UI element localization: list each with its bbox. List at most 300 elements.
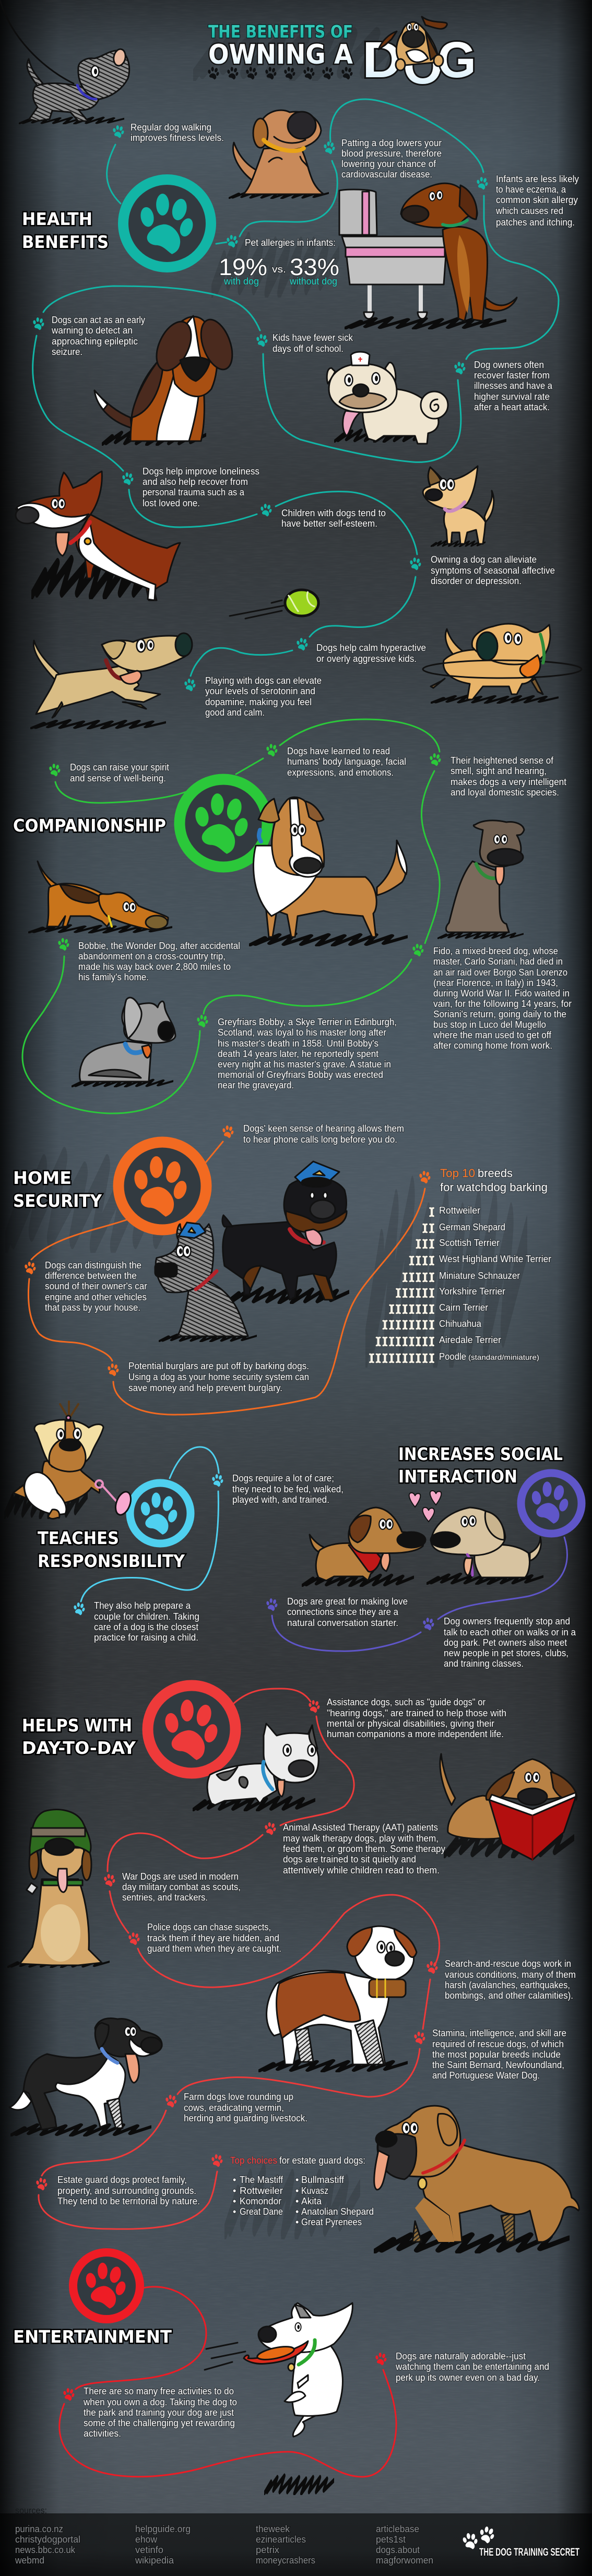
- list: top 10 watchdog breeds: Scottish Terrier: [439, 1238, 500, 1248]
- text: recovery: after a heart attack.: [474, 402, 550, 412]
- sources column 4: [376, 2524, 433, 2566]
- text: adorable: [395, 2351, 549, 2383]
- text: bobbie: abandonment on a cross-country trip,: [78, 951, 226, 961]
- sources column 3: ezinearticles: [256, 2534, 306, 2545]
- heading: helps with day-to-day: HELPS WITH: [22, 1715, 132, 1736]
- stat: pet allergies in infants: 19%: [219, 254, 267, 280]
- icon: puppy in diaper with rattle: [4, 1402, 134, 1519]
- icon: grey striped dog on leash: [19, 48, 129, 124]
- text: patting: lowering your chance of: [341, 159, 436, 169]
- text: therapy dogs: dogs are trained to sit quietly and: [283, 1854, 416, 1865]
- connector: responsibility curve: [81, 1447, 219, 1601]
- text: burglars: [128, 1361, 309, 1393]
- sources column 4: magforwomen: [376, 2555, 433, 2566]
- sources column 2: helpguide.org: [135, 2524, 191, 2534]
- text: assistance dogs: mental or physical disabilities, giving their: [327, 1718, 494, 1729]
- text: recovery: [474, 360, 553, 412]
- text: assistance dogs: Assistance dogs, such as "guide dogs" or: [327, 1697, 486, 1707]
- text: police dogs: guard them when they are caught.: [147, 1943, 281, 1954]
- text: therapy dogs: Animal Assisted Therapy (AAT) patients: [283, 1822, 438, 1833]
- heading: health benefits: BENEFITS: [22, 232, 109, 252]
- text: adorable: watching them can be entertaining and: [395, 2361, 549, 2372]
- text: epileptic: seizure.: [52, 347, 82, 357]
- text: free activities: the park and training your dog are just: [84, 2407, 234, 2418]
- health paw markers: [33, 125, 488, 691]
- text: dog walking: improves fitness levels.: [131, 133, 224, 143]
- text: war dogs: [122, 1871, 241, 1903]
- list: top choices for estate guard dogs: •: [295, 2196, 299, 2206]
- text: prepare for children: [94, 1600, 199, 1643]
- text: free activities: [83, 2386, 237, 2439]
- text: greyfriars bobby: Scotland, was loyal to his master long after: [218, 1027, 386, 1038]
- connector: day-to-day curve: [39, 1689, 440, 2229]
- list: top choices for estate guard dogs: Top choices: [230, 2155, 277, 2166]
- text: greyfriars bobby: memorial of Greyfriars Bobby was erected: [218, 1070, 383, 1080]
- text: estate guard dogs: property, and surrounding grounds.: [57, 2186, 196, 2196]
- list: top 10 watchdog breeds: Rottweiler: [439, 1205, 480, 1216]
- text: assistance dogs: [327, 1697, 506, 1739]
- text: greyfriars bobby: near the graveyard.: [218, 1080, 294, 1090]
- icon: tan sitting dog: [229, 110, 329, 198]
- text: war dogs: War Dogs are used in modern: [122, 1871, 239, 1882]
- text: therapy dogs: attentively while children read to them.: [283, 1865, 440, 1875]
- sources column 3: moneycrashers: [256, 2555, 315, 2566]
- text: fido: Fido, a mixed-breed dog, whose: [433, 946, 558, 956]
- list: top choices for estate guard dogs: •: [295, 2217, 299, 2227]
- icon: scottish terrier police dog: [155, 1222, 257, 1342]
- text: free activities: There are so many free activities to do: [84, 2386, 234, 2396]
- heading: home security: [13, 1168, 102, 1211]
- text: bobbie: made his way back over 2,800 miles to: [78, 961, 231, 972]
- text: sick days: days off of school.: [273, 343, 344, 354]
- text: fido: where the man used to get off: [433, 1030, 552, 1040]
- home security paw markers: [25, 1125, 431, 1376]
- stat: pet allergies in infants: vs.: [272, 264, 286, 275]
- text: love connections: connections since they are a: [287, 1607, 399, 1617]
- text: police dogs: [147, 1922, 281, 1954]
- text: free activities: some of the challenging yet rewarding: [84, 2418, 235, 2428]
- text: care: Dogs require a lot of care;: [232, 1473, 334, 1483]
- icon: greyfriars bobby terrier: [72, 998, 175, 1087]
- text: loneliness: Dogs help improve loneliness: [143, 466, 259, 477]
- text: adorable: Dogs are naturally adorable--just: [396, 2351, 526, 2361]
- text: epileptic: approaching epileptic: [52, 336, 138, 347]
- icon: corgi: [16, 471, 180, 600]
- text: greyfriars bobby: his master's death in 1858. Until Bobby's: [218, 1038, 378, 1049]
- text: burglars: Potential burglars are put off by barking dogs.: [128, 1361, 309, 1371]
- title line: the benefits of: THE BENEFITS OF: [208, 21, 353, 42]
- text: fido: (near Florence, in Italy) in 1943,: [433, 978, 558, 988]
- text: care: played with, and trained.: [232, 1494, 329, 1505]
- text: dog walking: [131, 122, 224, 143]
- icon: home security paw ring: [119, 1142, 206, 1230]
- companionship paw markers: [49, 744, 441, 1027]
- text: eczema: which causes red: [495, 206, 563, 216]
- text: bobbie: Bobbie, the Wonder Dog, after accidental: [78, 941, 240, 951]
- text: eczema: [495, 174, 579, 228]
- sources column 2: [135, 2524, 191, 2566]
- text: serotonin: Playing with dogs can elevate: [205, 675, 322, 686]
- text: prepare for children: practice for raising a child.: [94, 1632, 198, 1643]
- text: war dogs: day military combat as scouts,: [122, 1882, 241, 1892]
- text: rescue breeds: the most popular breeds include: [432, 2049, 561, 2060]
- text: epileptic: Dogs can act as an early: [52, 315, 145, 325]
- icon: social paw ring: [521, 1473, 582, 1534]
- text: assistance dogs: "hearing dogs," are trained to help those with: [327, 1708, 506, 1718]
- text: search and rescue: [445, 1958, 576, 2001]
- responsibility paw markers: [74, 1474, 223, 1615]
- stat: pet allergies in infants: [219, 238, 339, 287]
- icon: bobbie the wonder dog: [28, 861, 172, 933]
- heading: teaches responsibility: TEACHES: [38, 1528, 119, 1548]
- stat: pet allergies in infants: Pet allergies in infants:: [245, 238, 336, 248]
- icon: collie: [249, 797, 408, 945]
- text: self-esteem: [281, 508, 386, 529]
- text: care: they need to be fed, walked,: [232, 1484, 344, 1494]
- list: top choices for estate guard dogs: Great Dane: [240, 2206, 283, 2217]
- text: therapy dogs: may walk therapy dogs, play with them,: [283, 1833, 439, 1844]
- text: meet new people: new people in pet stores, clubs,: [444, 1648, 569, 1658]
- list: top 10 watchdog breeds: breeds: [478, 1167, 513, 1180]
- text: eczema: patches and itching.: [496, 217, 575, 228]
- text: loneliness: [143, 466, 259, 508]
- text: bobbie: [78, 941, 240, 982]
- title line: owning a: OWNING A: [208, 39, 353, 70]
- word: dog: [362, 31, 476, 94]
- text: serotonin: your levels of serotonin and: [205, 686, 315, 696]
- heading: teaches responsibility: [38, 1528, 185, 1571]
- text: free activities: when you own a dog. Taking the dog to: [83, 2397, 237, 2407]
- icon: spotted assistance dog: [193, 1724, 318, 1810]
- text: eczema: common skin allergy: [496, 195, 578, 205]
- sources column 4: pets1st: [376, 2534, 406, 2545]
- paw print trail: [208, 67, 353, 79]
- connector: social curve: [272, 1537, 567, 1651]
- text: farm dogs: herding and guarding livestock.: [184, 2113, 307, 2123]
- text: prepare for children: couple for children. Taking: [94, 1611, 199, 1622]
- text: love connections: Dogs are great for making love: [287, 1596, 408, 1607]
- list: top choices for estate guard dogs: Akita: [301, 2196, 322, 2206]
- icon: dog biting the O: [378, 17, 447, 70]
- list: top choices for estate guard dogs: Great Pyrenees: [301, 2217, 362, 2227]
- icon: rottweiler police dog: [222, 1161, 349, 1303]
- text: police dogs: track them if they are hidden, and: [147, 1933, 279, 1943]
- text: farm dogs: Farm dogs love rounding up: [184, 2092, 293, 2102]
- heading: increases social interaction: INTERACTION: [398, 1466, 517, 1487]
- icon: responsibility paw ring: [130, 1483, 191, 1544]
- text: body language: Dogs have learned to read: [287, 746, 390, 756]
- text: body language: [287, 746, 406, 778]
- heading: increases social interaction: [398, 1444, 563, 1487]
- list: top 10 watchdog breeds: (standard/miniature): [468, 1353, 539, 1361]
- icon: tennis ball: [230, 590, 318, 619]
- list: top choices for estate guard dogs: •: [233, 2175, 236, 2185]
- text: recovery: illnesses and have a: [474, 381, 553, 391]
- icon: health paw ring: [123, 180, 211, 267]
- text: patting: [341, 138, 442, 180]
- text: therapy dogs: feed them, or groom them. Some therapy: [283, 1844, 445, 1854]
- text: hearing: [243, 1123, 404, 1145]
- text: greyfriars bobby: death 14 years later, he reportedly spent: [218, 1049, 378, 1059]
- text: senses: Their heightened sense of: [451, 755, 554, 766]
- text: serotonin: dopamine, making you feel: [205, 697, 312, 707]
- sources column 3: petrix: [256, 2545, 279, 2555]
- text: prepare for children: care of a dog is the closest: [94, 1622, 198, 1632]
- stat: pet allergies in infants: with dog: [223, 276, 259, 287]
- text: dog walking: Regular dog walking: [131, 122, 211, 133]
- list: top 10 watchdog breeds: [369, 1167, 551, 1363]
- connector: entertainment curve: [60, 2287, 396, 2477]
- heading: increases social interaction: INCREASES SOCIAL: [398, 1444, 563, 1464]
- icon: entertainment paw ring: [73, 2252, 140, 2319]
- heading: helps with day-to-day: [22, 1715, 136, 1758]
- text: love connections: natural conversation starter.: [287, 1618, 398, 1628]
- title: [208, 17, 476, 94]
- sources column 4: articlebase: [376, 2524, 419, 2534]
- text: serotonin: good and calm.: [205, 707, 265, 718]
- heading: entertainment: ENTERTAINMENT: [13, 2326, 172, 2347]
- text: senses: smell, sight and hearing,: [451, 766, 547, 776]
- text: meet new people: Dog owners frequently stop and: [444, 1616, 570, 1627]
- icon: two dogs in love: [302, 1507, 543, 1586]
- icon: war dog: [7, 1810, 110, 1967]
- word: dog: O: [403, 38, 443, 94]
- day-to-day paw markers: [36, 1700, 438, 2190]
- text: fido: vain, for the following 14 years, for: [433, 999, 572, 1009]
- text: meet new people: dog park. Pet owners also meet: [444, 1637, 567, 1648]
- sources column 2: wikipedia: [135, 2555, 174, 2566]
- text: seasonal affective disorder: symptoms of seasonal affective: [431, 565, 555, 576]
- text: bobbie: his family's home.: [78, 972, 149, 982]
- text: war dogs: sentries, and trackers.: [122, 1892, 208, 1903]
- text: search and rescue: bombings, and other calamities).: [445, 1990, 573, 2001]
- text: adorable: perk up its owner even on a bad day.: [396, 2372, 540, 2383]
- text: car engines: sound of their owner's car: [45, 1281, 147, 1291]
- text: car engines: engine and other vehicles: [45, 1292, 147, 1302]
- sources column 1: webmd: [15, 2555, 44, 2566]
- icon: baby stroller: [339, 189, 506, 328]
- heading: companionship: COMPANIONSHIP: [13, 815, 166, 836]
- list: top choices for estate guard dogs: •: [233, 2186, 236, 2196]
- sources column 3: theweek: [256, 2524, 290, 2534]
- list: top 10 watchdog breeds: Miniature Schnauzer: [439, 1271, 520, 1281]
- text: loneliness: personal trauma such as a: [143, 487, 245, 497]
- sources column 1: news.bbc.co.uk: [15, 2545, 76, 2555]
- text: estate guard dogs: Estate guard dogs protect family,: [57, 2175, 187, 2185]
- list: top 10 watchdog breeds: Chihuahua: [439, 1319, 482, 1329]
- list: top 10 watchdog breeds: Cairn Terrier: [439, 1302, 488, 1313]
- icon: day-to-day paw ring: [148, 1685, 235, 1773]
- icon: border collie: [9, 2019, 162, 2135]
- text: meet new people: [444, 1616, 576, 1669]
- heading: helps with day-to-day: DAY-TO-DAY: [22, 1738, 136, 1758]
- list: top choices for estate guard dogs: Rottweiler: [240, 2186, 283, 2196]
- text: calm kids: [316, 643, 426, 664]
- list: top choices for estate guard dogs: •: [233, 2206, 236, 2217]
- footer: [0, 2506, 592, 2576]
- icon: fido sitting: [437, 821, 524, 939]
- text: car engines: difference between the: [45, 1271, 137, 1281]
- icon: pug with nurse hat: [327, 352, 448, 444]
- sources column 2: ehow: [135, 2534, 158, 2545]
- text: fido: an air raid over Borgo San Lorenzo: [433, 967, 567, 978]
- text: rescue breeds: the Saint Bernard, Newfoundland,: [432, 2060, 564, 2070]
- text: self-esteem: have better self-esteem.: [281, 518, 377, 529]
- text: meet new people: talk to each other on walks or in a: [444, 1627, 576, 1637]
- text: therapy dogs: [283, 1822, 445, 1875]
- text: patting: cardiovascular disease.: [341, 169, 432, 180]
- icon: mastiff: [374, 2106, 579, 2252]
- text: search and rescue: various conditions, many of them: [445, 1969, 576, 1980]
- text: greyfriars bobby: [218, 1017, 397, 1090]
- text: recovery: Dog owners often: [474, 360, 544, 370]
- text: loneliness: and also help recover from: [143, 477, 248, 487]
- list: top choices for estate guard dogs: •: [295, 2206, 299, 2217]
- leash: [0, 0, 74, 84]
- list: top choices for estate guard dogs: The Mastiff: [240, 2175, 283, 2185]
- text: raise spirit: and sense of well-being.: [70, 773, 166, 784]
- text: hearing: to hear phone calls long before you do.: [243, 1134, 397, 1145]
- sources column 3: [256, 2524, 315, 2566]
- sources column 1: [15, 2524, 80, 2566]
- text: estate guard dogs: They tend to be territorial by nature.: [57, 2196, 200, 2206]
- icon: companionship paw ring: [180, 779, 267, 867]
- list: top choices for estate guard dogs: for estate guard dogs:: [279, 2155, 365, 2166]
- text: seasonal affective disorder: disorder or depression.: [431, 576, 522, 586]
- text: senses: and loyal domestic species.: [451, 787, 559, 798]
- sources column 2: vetinfo: [135, 2545, 163, 2555]
- text: car engines: [45, 1260, 147, 1313]
- text: senses: makes dogs a very intelligent: [451, 777, 566, 787]
- text: burglars: Using a dog as your home security system can: [128, 1372, 309, 1382]
- connector: health curve: [33, 99, 559, 676]
- sources column 4: dogs.about: [376, 2545, 420, 2555]
- text: recovery: higher survival rate: [474, 391, 550, 402]
- text: sick days: [273, 333, 353, 354]
- icon: dog reading a book: [440, 1754, 577, 1860]
- text: farm dogs: cows, eradicating vermin,: [184, 2103, 284, 2113]
- text: rescue breeds: [432, 2028, 566, 2081]
- sources label: sources:: [15, 2506, 47, 2515]
- text: assistance dogs: human companions a more independent life.: [327, 1729, 504, 1739]
- text: sick days: Kids have fewer sick: [273, 333, 353, 343]
- text: eczema: Infants are less likely: [496, 174, 579, 184]
- connector: companionship curve: [22, 719, 440, 1113]
- text: fido: bus stop in Luco del Mugello: [433, 1019, 546, 1030]
- heading: home security: SECURITY: [13, 1191, 102, 1211]
- text: loneliness: lost loved one.: [143, 498, 200, 508]
- social paw markers: [266, 1598, 434, 1630]
- list: top 10 watchdog breeds: West Highland White Terrier: [439, 1254, 551, 1264]
- text: fido: master, Carlo Soriani, had died in: [433, 956, 563, 967]
- logo: the dog training secret: [461, 2526, 579, 2558]
- text: calm kids: or overly aggressive kids.: [316, 654, 417, 664]
- entertainment paw markers: [63, 2353, 387, 2401]
- text: patting: blood pressure, therefore: [341, 148, 442, 159]
- text: self-esteem: Children with dogs tend to: [281, 508, 386, 518]
- text: search and rescue: harsh (avalanches, earthquakes,: [445, 1980, 570, 1990]
- text: care: [232, 1473, 344, 1505]
- list: top choices for estate guard dogs: •: [295, 2186, 299, 2196]
- list: top choices for estate guard dogs: [230, 2155, 374, 2227]
- text: raise spirit: Dogs can raise your spirit: [70, 762, 169, 773]
- sources column 1: christydogportal: [15, 2534, 80, 2545]
- text: search and rescue: Search-and-rescue dogs work in: [445, 1958, 571, 1969]
- icon: white dog with frisbee: [205, 2303, 352, 2437]
- text: recovery: recover faster from: [474, 370, 550, 381]
- text: body language: humans' body language, facial: [287, 756, 406, 767]
- text: burglars: save money and help prevent burglary.: [128, 1383, 282, 1393]
- list: top 10 watchdog breeds: Poodle: [439, 1351, 466, 1362]
- text: epileptic: warning to detect an: [51, 325, 133, 336]
- list: top 10 watchdog breeds: German Shepard: [439, 1222, 505, 1232]
- text: fido: after coming home from work.: [433, 1040, 552, 1051]
- list: top choices for estate guard dogs: •: [295, 2175, 299, 2185]
- list: top choices for estate guard dogs: Bullmastiff: [301, 2175, 345, 2185]
- list: top choices for estate guard dogs: Komondor: [240, 2196, 281, 2206]
- icon: chihuahua: [423, 466, 494, 547]
- text: seasonal affective disorder: Owning a dog can alleviate: [431, 554, 537, 565]
- sources column 1: purina.co.nz: [15, 2524, 63, 2534]
- text: estate guard dogs: [57, 2175, 200, 2206]
- icon: frisbee dog shadow: [264, 2476, 334, 2494]
- text: police dogs: Police dogs can chase suspects,: [147, 1922, 271, 1932]
- text: greyfriars bobby: Greyfriars Bobby, a Skye Terrier in Edinburgh,: [218, 1017, 397, 1027]
- list: top 10 watchdog breeds: Top 10: [440, 1167, 475, 1180]
- list: top choices for estate guard dogs: •: [233, 2196, 236, 2206]
- text: rescue breeds: Stamina, intelligence, and skill are: [432, 2028, 566, 2038]
- text: greyfriars bobby: every night at his master's grave. A statue in: [218, 1059, 391, 1070]
- word: dog: D: [362, 31, 402, 88]
- text: raise spirit: [70, 762, 169, 784]
- text: fido: [433, 946, 572, 1051]
- text: senses: [451, 755, 566, 798]
- stat: pet allergies in infants: without dog: [289, 276, 337, 287]
- heading: home security: HOME: [13, 1168, 72, 1188]
- icon: dog with hula hoop: [423, 624, 582, 703]
- list: top 10 watchdog breeds: Yorkshire Terrier: [439, 1286, 505, 1297]
- text: love connections: [287, 1596, 408, 1628]
- text: rescue breeds: required of rescue dogs, of which: [432, 2039, 564, 2049]
- text: patting: Patting a dog lowers your: [341, 138, 442, 148]
- list: top choices for estate guard dogs: Kuvasz: [301, 2186, 328, 2196]
- heading: teaches responsibility: RESPONSIBILITY: [38, 1551, 185, 1571]
- icon: st bernard with barrel: [258, 1926, 417, 2071]
- text: fido: during World War II. Fido waited in: [433, 988, 570, 999]
- word: dog: G: [437, 31, 476, 88]
- heading: health benefits: HEALTH: [22, 209, 92, 229]
- text: eczema: to have eczema, a: [496, 184, 566, 195]
- text: car engines: that pass by your house.: [45, 1302, 140, 1313]
- text: hearing: Dogs' keen sense of hearing allows them: [243, 1123, 404, 1134]
- icon: hearts: [409, 1491, 441, 1522]
- text: seasonal affective disorder: [431, 554, 555, 586]
- text: farm dogs: [184, 2092, 307, 2123]
- text: rescue breeds: and Portuguese Water Dog.: [432, 2070, 540, 2081]
- list: top 10 watchdog breeds: Airedale Terrier: [439, 1335, 501, 1345]
- icon: brown dog looking into stroller: [401, 183, 517, 321]
- text: meet new people: and training classes.: [444, 1658, 524, 1669]
- text: prepare for children: They also help prepare a: [94, 1600, 191, 1611]
- stat: pet allergies in infants: 33%: [290, 254, 339, 280]
- icon: beagle: [94, 315, 239, 445]
- text: car engines: Dogs can distinguish the: [45, 1260, 141, 1271]
- text: serotonin: [205, 675, 322, 718]
- list: top choices for estate guard dogs: Anatolian Shepard: [301, 2206, 374, 2217]
- icon: tan running dog: [30, 633, 192, 729]
- text: body language: expressions, and emotions.: [287, 767, 394, 778]
- list: top 10 watchdog breeds: for watchdog barking: [440, 1181, 548, 1194]
